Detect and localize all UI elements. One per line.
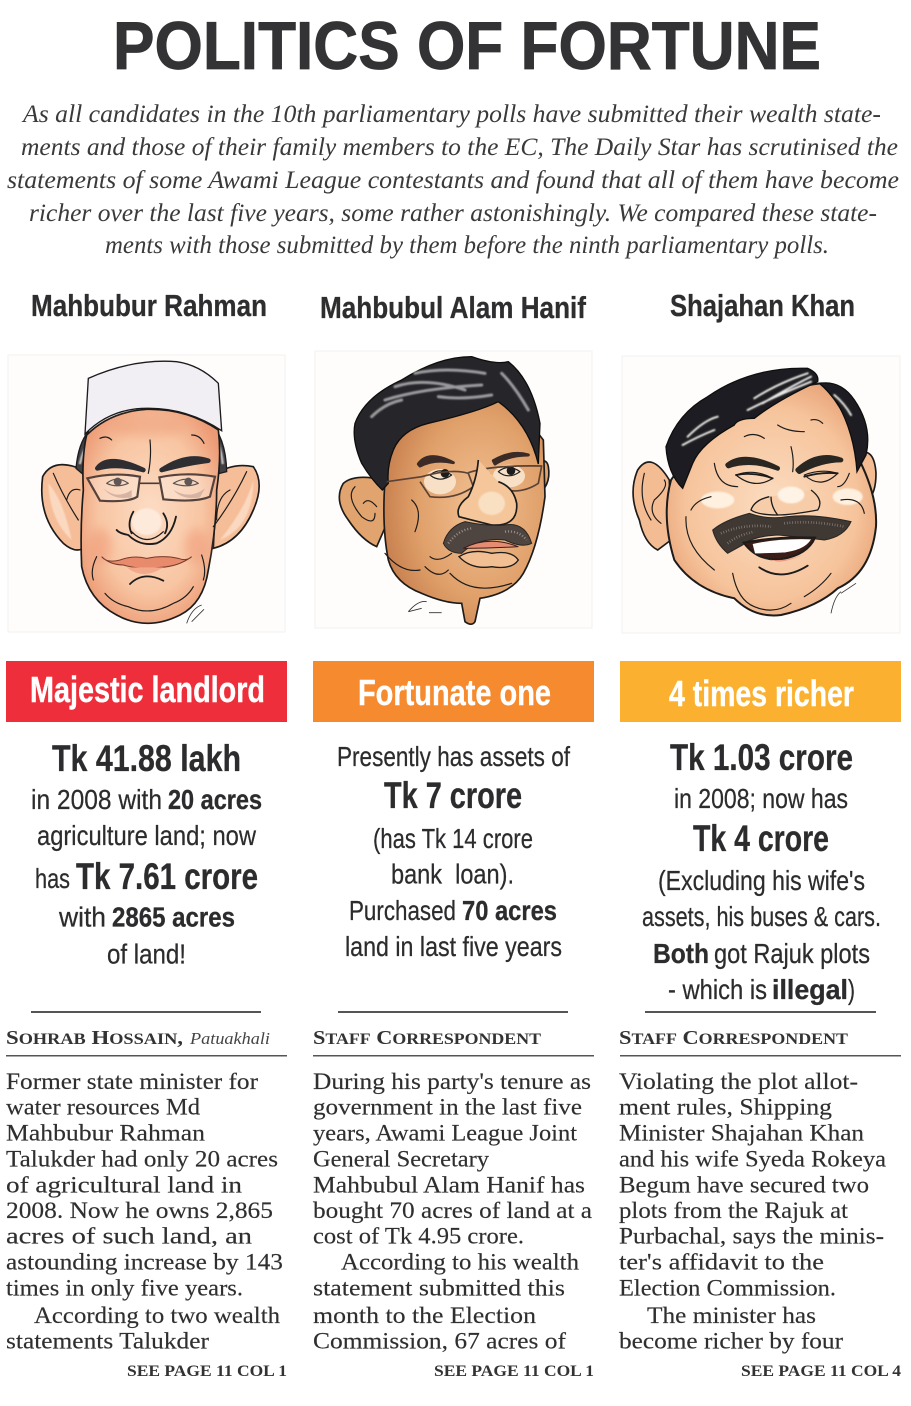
summary: Mahbubur Rahman: Tk 7.61 crore bbox=[76, 856, 258, 897]
summary: Mahbubul Alam Hanif: Tk 7 crore bbox=[384, 775, 522, 816]
name: Shajahan Khan: Shajahan Khan bbox=[670, 288, 855, 323]
byline: Sohrab Hossain bbox=[6, 1027, 270, 1049]
continuation note column 3: SEE PAGE 11 COL 4 bbox=[741, 1363, 901, 1380]
intro paragraph: richer over the last five years, some rather astonishingly. We compared these state- bbox=[29, 200, 877, 227]
article: column 1: Talukder had only 20 acres bbox=[6, 1146, 278, 1172]
intro paragraph: ments and those of their family members to the EC, The Daily Star has scrutinised the bbox=[21, 134, 898, 161]
summary: Shajahan Khan bbox=[642, 737, 881, 1005]
article: column 3: Violating the plot allot- bbox=[619, 1069, 858, 1094]
summary: Mahbubul Alam Hanif: Presently has assets of bbox=[337, 741, 570, 772]
article: column 2: years, Awami League Joint bbox=[313, 1120, 578, 1146]
summary: Mahbubur Rahman: agriculture land; now bbox=[37, 820, 257, 851]
headline bar: 4 times richer bbox=[620, 661, 901, 722]
headline bar: Majestic landlord bbox=[6, 661, 287, 722]
article: column 3: Begum have secured two bbox=[619, 1172, 869, 1198]
summary: Mahbubul Alam Hanif: land in last five years bbox=[345, 931, 562, 962]
caricature: Shajahan Khan bbox=[622, 356, 900, 633]
article: column 3: ment rules, Shipping bbox=[619, 1094, 833, 1120]
continuation note column 1: SEE PAGE 11 COL 1 bbox=[127, 1363, 287, 1380]
article: column 1: Mahbubur Rahman bbox=[6, 1120, 206, 1146]
article: column 3: become richer by four bbox=[619, 1328, 843, 1354]
byline: Sohrab Hossain: SOHRAB HOSSAIN , bbox=[6, 1027, 183, 1049]
summary: Mahbubur Rahman: of land! bbox=[107, 938, 186, 970]
article: column 1: 2008. Now he owns 2,865 bbox=[6, 1198, 273, 1223]
summary: Mahbubur Rahman: in 2008 with bbox=[31, 784, 162, 815]
summary: Mahbubur Rahman: Tk 41.88 lakh bbox=[52, 738, 241, 779]
byline: Staff Correspondent column 3: STAFF CORRESPONDENT bbox=[619, 1027, 848, 1049]
article: column 2: General Secretary bbox=[313, 1146, 490, 1172]
article: column 2: statement submitted this bbox=[313, 1276, 565, 1300]
byline: Staff Correspondent column 2: STAFF CORRESPONDENT bbox=[313, 1027, 541, 1049]
article: column 3: ter's affidavit to the bbox=[619, 1250, 824, 1274]
article: column 2: government in the last five bbox=[313, 1094, 582, 1120]
article: column 3: Purbachal, says the minis- bbox=[619, 1224, 884, 1248]
summary: Mahbubul Alam Hanif: bank loan). bbox=[391, 858, 514, 890]
intro paragraph: statements of some Awami League contestants and found that all of them have become bbox=[7, 167, 899, 194]
article: column 2: During his party's tenure as bbox=[313, 1069, 591, 1094]
continuation note column 2: SEE PAGE 11 COL 1 bbox=[434, 1363, 594, 1380]
summary: Shajahan Khan: illegal bbox=[772, 974, 848, 1005]
intro paragraph: As all candidates in the 10th parliamentary polls have submitted their wealth state- bbox=[21, 101, 881, 128]
article: column 3: The minister has bbox=[647, 1303, 816, 1328]
article: column 3: Minister Shajahan Khan bbox=[619, 1120, 865, 1146]
summary: Mahbubur Rahman: 2865 acres bbox=[112, 902, 235, 932]
article: column 1: of agricultural land in bbox=[6, 1172, 243, 1198]
summary: Mahbubur Rahman: with bbox=[58, 902, 106, 932]
title: POLITICS OF FORTUNE bbox=[113, 8, 821, 84]
article: column 2: According to his wealth bbox=[341, 1250, 580, 1274]
intro paragraph: ments with those submitted by them before the ninth parliamentary polls. bbox=[105, 232, 829, 259]
headline bar: Fortunate one: Fortunate one bbox=[358, 672, 551, 713]
summary: Shajahan Khan: Tk 4 crore bbox=[693, 818, 829, 859]
summary: Mahbubur Rahman: has bbox=[35, 863, 70, 894]
article: column 1: water resources Md bbox=[6, 1094, 201, 1120]
article: column 2: cost of Tk 4.95 crore. bbox=[313, 1224, 524, 1248]
summary: Mahbubul Alam Hanif: (has Tk 14 crore bbox=[373, 823, 533, 854]
article: column 3: plots from the Rajuk at bbox=[619, 1198, 849, 1223]
caricature: Mahbubur Rahman bbox=[8, 355, 285, 632]
byline: Sohrab Hossain: Patuakhali bbox=[189, 1029, 270, 1048]
summary: Shajahan Khan: Tk 1.03 crore bbox=[670, 737, 853, 778]
article: column 2: Mahbubul Alam Hanif has bbox=[313, 1172, 585, 1198]
name: Mahbubul Alam Hanif: Mahbubul Alam Hanif bbox=[320, 290, 587, 325]
summary: Shajahan Khan: got Rajuk plots bbox=[714, 938, 870, 969]
summary: Shajahan Khan: in 2008; now has bbox=[674, 783, 848, 814]
article: column 1: astounding increase by 143 bbox=[6, 1250, 283, 1274]
headline bar: Fortunate one bbox=[313, 661, 594, 722]
name: Mahbubur Rahman: Mahbubur Rahman bbox=[31, 288, 267, 323]
summary: Shajahan Khan: ) bbox=[848, 974, 855, 1005]
summary: Mahbubul Alam Hanif: Purchased bbox=[349, 895, 456, 926]
article: column 1: Former state minister for bbox=[6, 1069, 258, 1094]
summary: Mahbubur Rahman: 20 acres bbox=[168, 784, 262, 815]
article: column 1 bbox=[6, 1069, 283, 1354]
headline bar: 4 times richer: 4 times richer bbox=[669, 673, 854, 714]
article: column 3: Election Commission. bbox=[619, 1276, 836, 1300]
article: column 2: Commission, 67 acres of bbox=[313, 1328, 566, 1354]
summary: Shajahan Khan: Both bbox=[653, 938, 709, 969]
article: column 3: and his wife Syeda Rokeya bbox=[619, 1146, 886, 1172]
summary: Mahbubul Alam Hanif bbox=[337, 741, 570, 962]
article: column 2: month to the Election bbox=[313, 1303, 537, 1328]
summary: Shajahan Khan: (Excluding his wife's bbox=[658, 865, 865, 896]
intro paragraph bbox=[7, 101, 899, 259]
article: column 1: According to two wealth bbox=[34, 1303, 281, 1328]
article: column 1: statements Talukder bbox=[6, 1328, 209, 1354]
headline bar: Majestic landlord: Majestic landlord bbox=[30, 669, 265, 710]
article: column 2: bought 70 acres of land at a bbox=[313, 1198, 592, 1223]
article: column 2 bbox=[313, 1069, 592, 1354]
summary: Mahbubul Alam Hanif: 70 acres bbox=[462, 895, 557, 926]
caricature: Mahbubul Alam Hanif bbox=[315, 351, 592, 628]
summary: Mahbubur Rahman bbox=[31, 738, 262, 970]
article: column 3 bbox=[619, 1069, 886, 1354]
article: column 1: times in only five years. bbox=[6, 1276, 243, 1300]
summary: Shajahan Khan: - which is bbox=[668, 974, 767, 1005]
article: column 1: acres of such land, an bbox=[6, 1224, 253, 1248]
